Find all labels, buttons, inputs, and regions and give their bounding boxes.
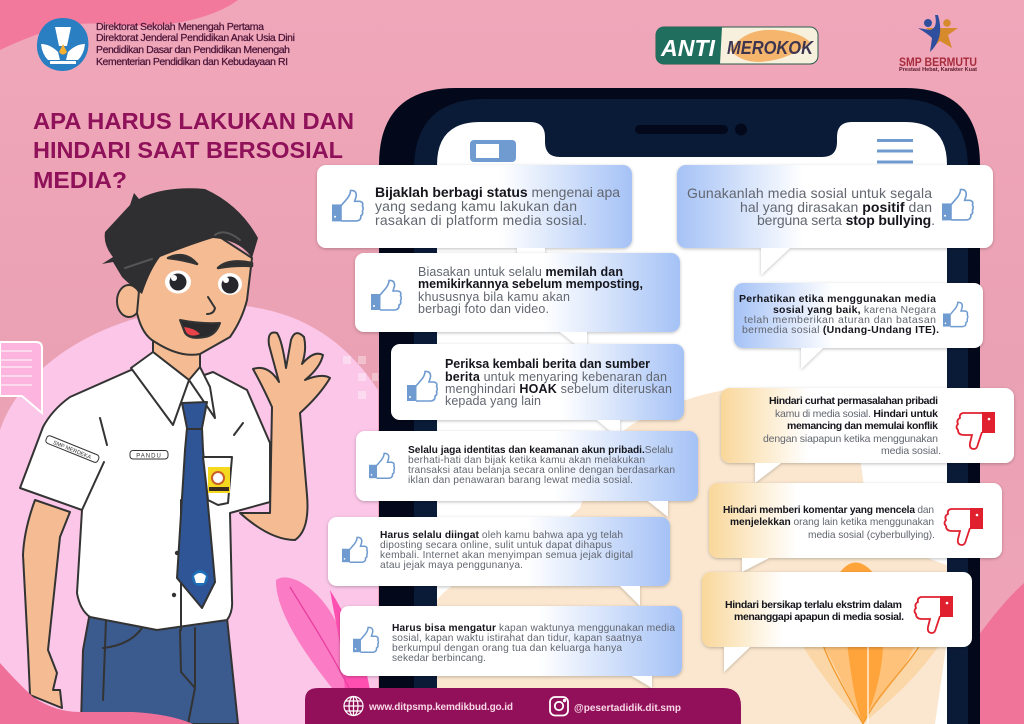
decorative squares [343, 356, 378, 399]
icon: instagram [550, 697, 568, 716]
bubble: hindari curhat: kamu di media sosial. Hindari untuk [775, 408, 938, 420]
instagram handle: @pesertadidik.dit.smp [574, 703, 681, 714]
bubble: periksa berita: Periksa kembali berita dan sumber [445, 357, 650, 371]
phone inner bezel [414, 99, 968, 724]
bubble: bisa mengatur: berkumpul dengan orang tua dan keluarga hanya [392, 643, 622, 654]
institution text [96, 21, 295, 68]
icon: globe [344, 696, 363, 716]
bubble: periksa berita: menghindari HOAK sebelum diteruskan [445, 382, 672, 396]
bubble: selalu diingat: kembali. Internet akan menyimpan semua jejak digital [380, 550, 633, 561]
bubble: hindari curhat [721, 388, 1014, 483]
collar [131, 352, 189, 425]
icon: thumbs down [914, 596, 953, 633]
bubble: perhatikan etika: Perhatikan etika menggunakan media [739, 293, 936, 305]
beige blob [437, 390, 947, 724]
orange plant [803, 562, 938, 724]
bubble: periksa berita: berita untuk menyaring kebenaran dan [445, 370, 667, 384]
bubble: jaga identitas: transaksi atau belanja secara online dengan berdasarkan [408, 465, 675, 476]
icon: thumbs up [369, 453, 394, 478]
bubble: memilah [355, 253, 680, 344]
bubble: bagi status [317, 165, 632, 258]
bubble: hindari komentar: media sosial (cyberbullying). [808, 530, 935, 541]
face [137, 232, 252, 355]
phone body [379, 88, 980, 724]
toggle icon [470, 140, 516, 162]
bubble: bisa mengatur: sosial, kapan waktu istirahat dan tidur, kapan saatnya [392, 633, 642, 644]
bubble: bagi status: yang sedang kamu lakukan dan [375, 198, 577, 214]
institution text: Pendidikan Dasar dan Pendidikan Menengah [96, 44, 290, 56]
icon: thumbs up [371, 280, 401, 310]
tie badge [192, 570, 208, 586]
hair [102, 188, 258, 294]
hamburger menu [877, 140, 913, 162]
bubble: media sosial positif: Gunakanlah media sosial untuk segala [687, 185, 932, 201]
bubble: bisa mengatur [340, 606, 682, 688]
institution text: Direktorat Jenderal Pendidikan Anak Usia Dini [96, 32, 295, 44]
bubble: jaga identitas [356, 431, 698, 517]
bubble: hindari komentar: menjelekkan orang lain ketika menggunakan [730, 517, 934, 528]
bubble: media sosial positif: hal yang dirasakan positif dan [740, 199, 932, 215]
bubble: hindari ekstrim [702, 572, 972, 672]
mouth [180, 320, 220, 338]
icon: thumbs up [943, 302, 968, 327]
shirt [20, 370, 270, 630]
tie [177, 402, 215, 608]
phone screen [437, 122, 947, 724]
bubble: jaga identitas: Selalu jaga identitas dan keamanan akun pribadi.Selalu [408, 445, 673, 456]
bubble: perhatikan etika [734, 283, 983, 369]
bubble: selalu diingat: atau jejak maya penggunanya. [380, 560, 523, 571]
eyes [165, 270, 242, 295]
bubble: media sosial positif [677, 165, 993, 275]
character: student [20, 188, 330, 724]
icon: thumbs up [353, 627, 378, 652]
bubble: hindari curhat: Hindari curhat permasalahan pribadi [769, 395, 938, 407]
pocket and school badge [203, 457, 232, 505]
pink plant [276, 577, 372, 710]
bubble: bagi status: Bijaklah berbagi status mengenai apa [375, 184, 620, 200]
institution text: Kementerian Pendidikan dan Kebudayaan RI [96, 56, 288, 68]
nose [207, 297, 215, 314]
bubble: media sosial positif: berguna serta stop bullying. [757, 212, 935, 228]
phone [379, 88, 980, 724]
bubble: memilah: Biasakan untuk selalu memilah dan [418, 265, 623, 279]
icon: thumbs down [944, 508, 983, 545]
bubble: memilah: khususnya bila kamu akan [418, 290, 570, 304]
bubble: periksa berita: kepada yang lain [445, 394, 541, 408]
title: APA HARUS LAKUKAN DAN [33, 108, 354, 134]
bubble: hindari ekstrim: Hindari bersikap terlalu ekstrim dalam [725, 599, 902, 611]
bubble: selalu diingat [328, 517, 670, 606]
eyebrows [168, 255, 252, 268]
bubble: bisa mengatur: Harus bisa mengatur kapan waktunya menggunakan media [392, 623, 675, 634]
icon: thumbs up [342, 537, 367, 562]
icon: thumbs down [956, 412, 995, 449]
icon: thumbs up [332, 190, 363, 221]
bubble: hindari ekstrim: menanggapi apapun di media sosial. [734, 611, 904, 623]
bubble: selalu diingat: Harus selalu diingat oleh kamu bahwa apa yg telah [380, 530, 623, 541]
bubble: hindari curhat: dengan siapapun ketika menggunakan [763, 433, 938, 445]
logo: SMP Bermutu: SMP BERMUTU [899, 55, 977, 69]
bubble: jaga identitas: berhati-hati dan bijak ketika kamu akan melakukan [408, 455, 645, 466]
sleeve tag [45, 435, 100, 464]
bottom right blob [975, 583, 1024, 724]
bubble: perhatikan etika: telah memberikan aturan dan batasan [744, 314, 936, 326]
website: www.ditpsmp.kemdikbud.go.id [368, 702, 513, 713]
shirt buttons [172, 551, 179, 597]
bubble: hindari curhat: memancing dan memulai konflik [787, 420, 938, 432]
bubble: hindari komentar [709, 483, 1002, 572]
speaker and camera [635, 124, 747, 136]
logo: Kemdikbud [37, 18, 88, 71]
neck [153, 335, 200, 380]
logo: Anti Merokok: MEROKOK [727, 38, 815, 58]
bottom left blob [0, 663, 193, 724]
ear [117, 285, 141, 317]
decorative speech icon [0, 342, 42, 413]
bubble: hindari curhat: media sosial. [881, 445, 941, 457]
name tag [130, 450, 168, 460]
sleeve tag: SMP MERDEKA [52, 440, 92, 461]
bubble: perhatikan etika: sosial yang baik, karena Negara [773, 304, 936, 316]
icon: thumbs up [407, 371, 437, 401]
bubble: perhatikan etika: bermedia sosial (Undang-Undang ITE). [742, 324, 939, 336]
bubble: bagi status: rasakan di platform media sosial. [375, 212, 587, 228]
logo: Anti Merokok: ANTI [660, 35, 716, 61]
bubble: bisa mengatur: sekedar berbincang. [392, 653, 486, 664]
icon: thumbs up [942, 189, 973, 220]
title [33, 108, 354, 193]
logo: SMP Bermutu: Prestasi Hebat, Karakter Kuat [899, 67, 977, 73]
pants [81, 612, 238, 724]
right arm [240, 332, 330, 540]
bubble: jaga identitas: iklan dan penawaran barang lewat media sosial. [408, 475, 633, 486]
logo: SMP Bermutu [899, 15, 977, 73]
top left blob [0, 0, 238, 50]
pink circle behind character [0, 305, 378, 724]
title: MEDIA? [33, 167, 127, 193]
footer bar [305, 688, 741, 724]
name tag: PANDU [136, 454, 162, 460]
institution text: Direktorat Sekolah Menengah Pertama [96, 21, 264, 33]
bubble: memilah: memikirkannya sebelum memposting, [418, 277, 643, 291]
bubble: selalu diingat: diposting secara online, sulit untuk dapat dihapus [380, 540, 612, 551]
left arm [23, 500, 70, 708]
title: HINDARI SAAT BERSOSIAL [33, 137, 343, 163]
logo: Anti Merokok [656, 27, 818, 64]
bubble: hindari komentar: Hindari memberi komentar yang mencela dan [723, 505, 934, 516]
bubble: periksa berita [391, 344, 684, 431]
bubble: memilah: berbagi foto dan video. [418, 302, 549, 316]
